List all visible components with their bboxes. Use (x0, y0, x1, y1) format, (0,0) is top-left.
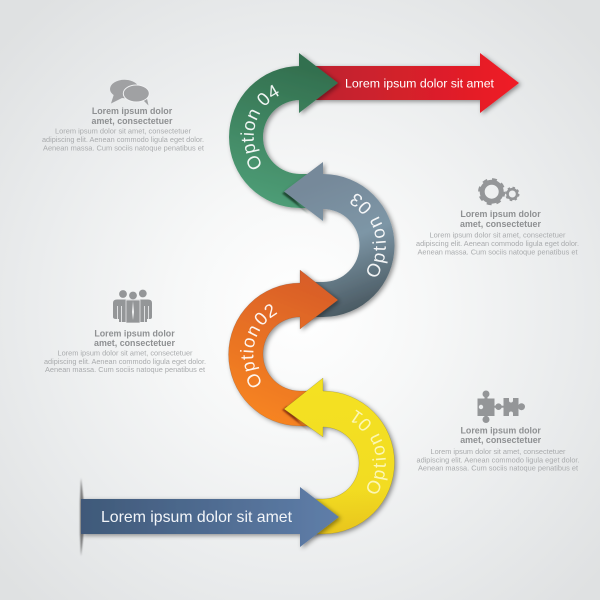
text block: right lower: Aenean massa. Cum sociis natoque penatibus et (418, 466, 578, 472)
shadow under yellow arrow tip (282, 406, 309, 431)
segment: option 03 gray (284, 162, 394, 317)
segment: option 02 orange (229, 270, 338, 426)
text block: right lower: Lorem ipsum dolor (461, 426, 541, 436)
label: blue arrow text: Lorem ipsum dolor sit amet (101, 509, 293, 526)
icon: people group (113, 290, 152, 323)
icon: gears (480, 180, 519, 204)
text block: right lower (416, 426, 580, 472)
icon: puzzle pieces (478, 390, 525, 423)
icon: speech bubbles (110, 80, 149, 106)
text block: right lower: Lorem ipsum dolor sit amet, consectetuer (430, 449, 566, 456)
text block: right upper: adipiscing elit. Aenean commodo ligula eget dolor. (416, 241, 579, 248)
text block: right lower: adipiscing elit. Aenean commodo ligula eget dolor. (416, 458, 580, 464)
text block: left middle: amet, consectetuer (94, 338, 175, 348)
text block: top left (42, 106, 204, 152)
arrow: blue input (81, 487, 339, 547)
text block: left middle: Aenean massa. Cum sociis natoque penatibus et (45, 367, 205, 374)
text block: left middle (44, 328, 206, 374)
text block: left middle: adipiscing elit. Aenean commodo ligula eget dolor. (44, 359, 206, 366)
text block: top left: Lorem ipsum dolor (92, 106, 173, 116)
label: option 03: Option 03 (350, 194, 388, 277)
shadow under gray arrow tip (282, 190, 309, 214)
label: option 01: Option 01 (352, 410, 388, 494)
text block: top left: amet, consectetuer (92, 116, 173, 126)
text block: right upper: Lorem ipsum dolor (460, 209, 541, 219)
text block: left middle: Lorem ipsum dolor (94, 328, 175, 338)
arrow: red output (315, 53, 519, 113)
text block: right lower: amet, consectetuer (460, 435, 542, 445)
label: option 02: Option 02 (240, 304, 278, 388)
text block: top left: adipiscing elit. Aenean commodo ligula eget dolor. (42, 137, 204, 144)
segment: option 01 yellow (284, 378, 394, 534)
text block: left middle: Lorem ipsum dolor sit amet, consectetuer (58, 350, 193, 358)
text block: top left: Lorem ipsum dolor sit amet, consectetuer (55, 128, 192, 136)
text block: right upper (416, 209, 579, 256)
segment: option 04 green (229, 53, 338, 208)
label: option 04: Option 04 (240, 84, 279, 170)
start tab shadow (80, 478, 84, 556)
text block: right upper: amet, consectetuer (460, 219, 541, 229)
label: red arrow text: Lorem ipsum dolor sit amet (345, 76, 495, 90)
text block: right upper: Lorem ipsum dolor sit amet, consectetuer (430, 232, 566, 240)
text block: right upper: Aenean massa. Cum sociis natoque penatibus et (418, 250, 578, 256)
text block: top left: Aenean massa. Cum sociis natoque penatibus et (43, 146, 204, 152)
